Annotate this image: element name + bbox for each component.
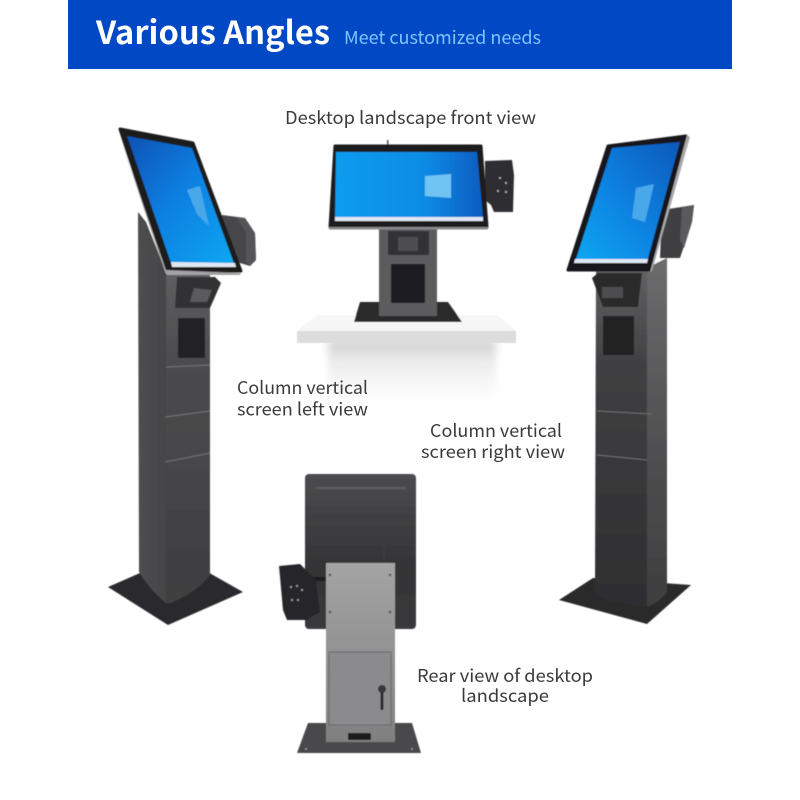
kiosk: column left view <box>108 129 256 625</box>
antenna <box>387 140 388 146</box>
kiosk: column right view <box>559 135 694 624</box>
stand <box>379 228 437 316</box>
scanner housing <box>175 277 221 308</box>
floor plate <box>108 562 243 625</box>
shelf <box>297 315 516 343</box>
printer door <box>178 318 205 358</box>
touchscreen <box>568 135 690 272</box>
label: left view: Column vertical <box>237 375 368 400</box>
kiosk: rear view <box>279 474 421 753</box>
side mount <box>279 564 327 620</box>
shelf shadow <box>328 340 496 402</box>
screen back <box>305 474 416 629</box>
side mount <box>485 160 514 212</box>
side mount <box>222 215 256 266</box>
kiosk: desktop front view <box>297 140 516 402</box>
label: rear view: landscape <box>461 683 549 708</box>
printer door <box>603 316 634 355</box>
label: right view: screen right view <box>421 439 565 464</box>
antenna <box>383 530 385 563</box>
base plate <box>354 302 462 322</box>
floor plate <box>559 578 691 624</box>
label: left view: screen left view <box>237 396 368 422</box>
column <box>595 258 667 607</box>
touchscreen <box>118 129 241 275</box>
subtitle: Meet customized needs <box>344 24 541 50</box>
title: Various Angles <box>95 8 330 54</box>
lock and keys <box>378 685 386 710</box>
header banner <box>68 0 732 69</box>
steel stand <box>326 563 395 742</box>
column <box>138 212 210 603</box>
label: rear view: Rear view of desktop <box>417 663 593 688</box>
base plate <box>297 723 421 753</box>
side mount <box>660 205 694 258</box>
label: front view: Desktop landscape front view <box>285 105 536 130</box>
scanner housing <box>592 273 642 307</box>
touchscreen <box>329 146 488 230</box>
label: right view: Column vertical <box>430 418 562 443</box>
